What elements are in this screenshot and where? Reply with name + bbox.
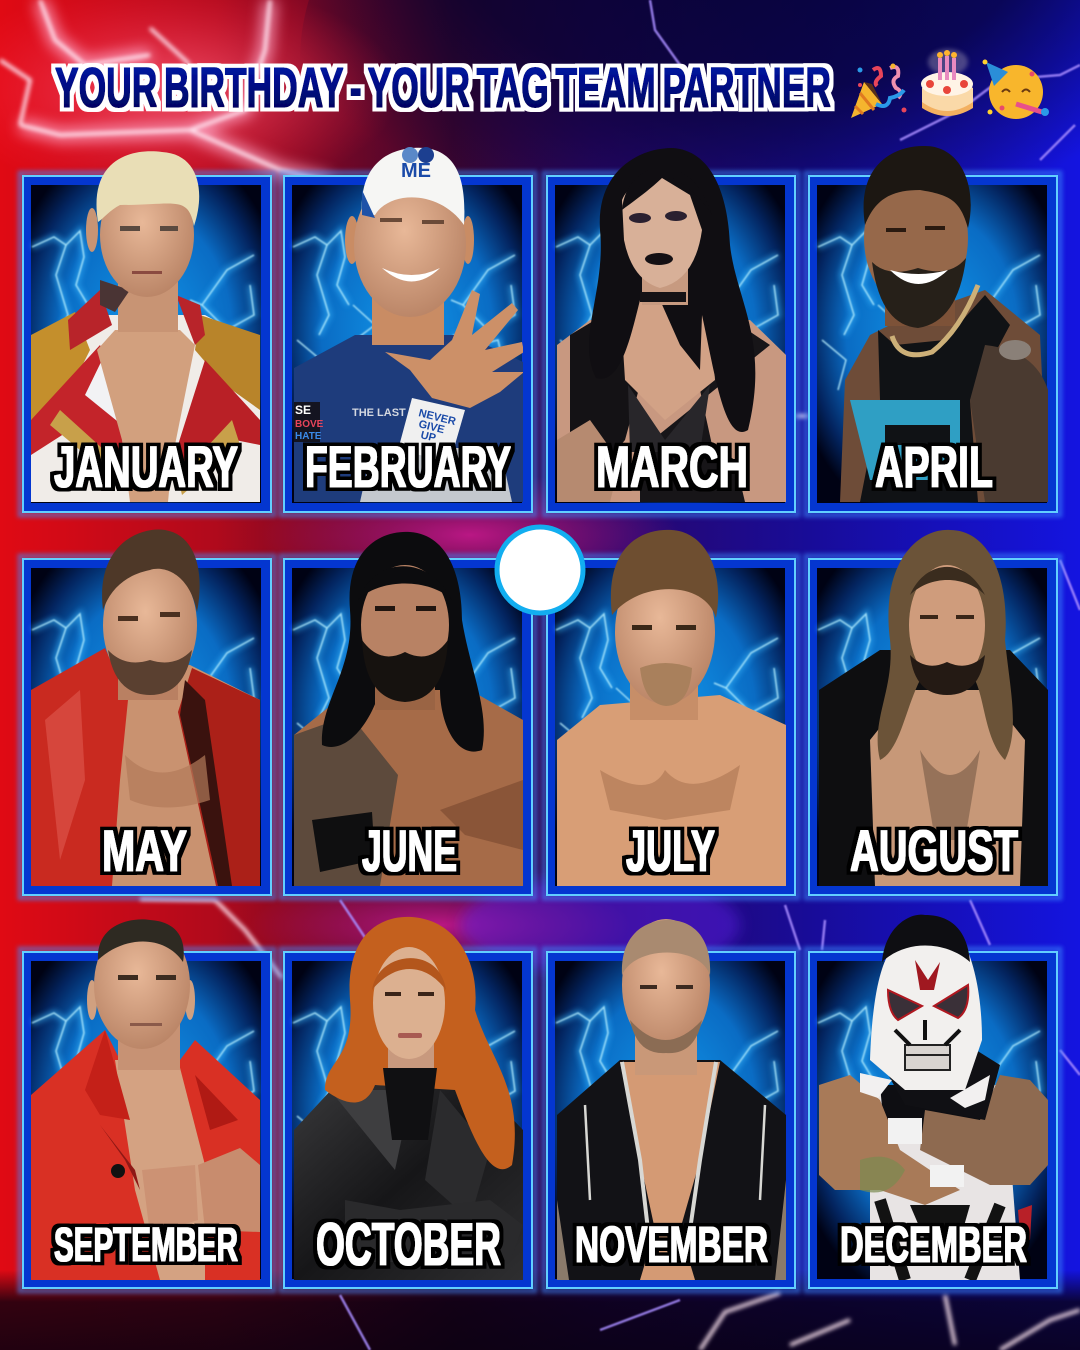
label: SEPTEMBER: SEPTEMBER: [54, 1219, 238, 1272]
centre white circle badge: [497, 527, 583, 613]
portrait: wrestler with long black hair and beard: [294, 532, 523, 886]
card: April: [806, 146, 1060, 515]
shirt print: rise above hate: HATE: [295, 431, 322, 442]
label: JUNE: JUNE: [362, 819, 457, 884]
shirt print: rise above hate: SE: [295, 403, 311, 417]
icon: birthday cake: [921, 49, 973, 116]
label: JANUARY: JANUARY: [54, 435, 238, 500]
card: January: [20, 151, 274, 515]
card: August: [806, 530, 1060, 898]
card: March: [544, 148, 798, 515]
shirt print: rise above hate: [294, 402, 324, 442]
icon: party popper: [851, 64, 906, 118]
portrait: masked wrestler with tattooed arms: [819, 915, 1048, 1280]
label: FEBRUARY: FEBRUARY: [305, 435, 511, 500]
portrait: wrestler in white cap and blue shirt: UP: [419, 429, 437, 445]
portrait: wrestler with long black hair: [557, 148, 786, 502]
wristband text: NEVER: [417, 407, 457, 428]
card: June: [281, 532, 535, 898]
portrait: smiling wrestler in black tank top: [840, 146, 1048, 502]
card: February: [281, 147, 535, 515]
portrait: wrestler in red vest: [31, 529, 260, 886]
label: MARCH: MARCH: [596, 435, 748, 500]
label: MAY: MAY: [102, 819, 187, 884]
card: December: [806, 915, 1060, 1291]
label: JULY: JULY: [626, 819, 715, 884]
cap logo: ME: [401, 160, 431, 182]
portrait: bald wrestler in black hoodie: [557, 919, 786, 1300]
card: October: [281, 917, 535, 1291]
icon: party face: [982, 60, 1049, 119]
portrait: wrestler in white cap and blue shirt: GIVE: [417, 418, 446, 436]
shirt print: the last: THE LAST T: [352, 407, 416, 419]
shirt print: rise above hate: BOVE: [295, 419, 324, 430]
card: September: [20, 919, 274, 1291]
label: NOVEMBER: NOVEMBER: [575, 1216, 768, 1273]
portrait: wrestler in red coat: [31, 919, 260, 1280]
card: November: [544, 919, 798, 1300]
portrait: orange-haired wrestler in black leather: [294, 917, 523, 1280]
label: APRIL: APRIL: [875, 435, 993, 500]
portrait: shirtless wrestler with short brown hair: [557, 530, 786, 886]
card: July: [544, 530, 798, 898]
label: OCTOBER: OCTOBER: [316, 1211, 501, 1278]
portrait: wrestler with long hair and black fur coat: [819, 530, 1048, 886]
portrait: wrestler in white cap and blue shirt: [294, 147, 524, 502]
card: May: [20, 529, 274, 898]
portrait: blond wrestler in gold and red jacket: [31, 151, 260, 502]
